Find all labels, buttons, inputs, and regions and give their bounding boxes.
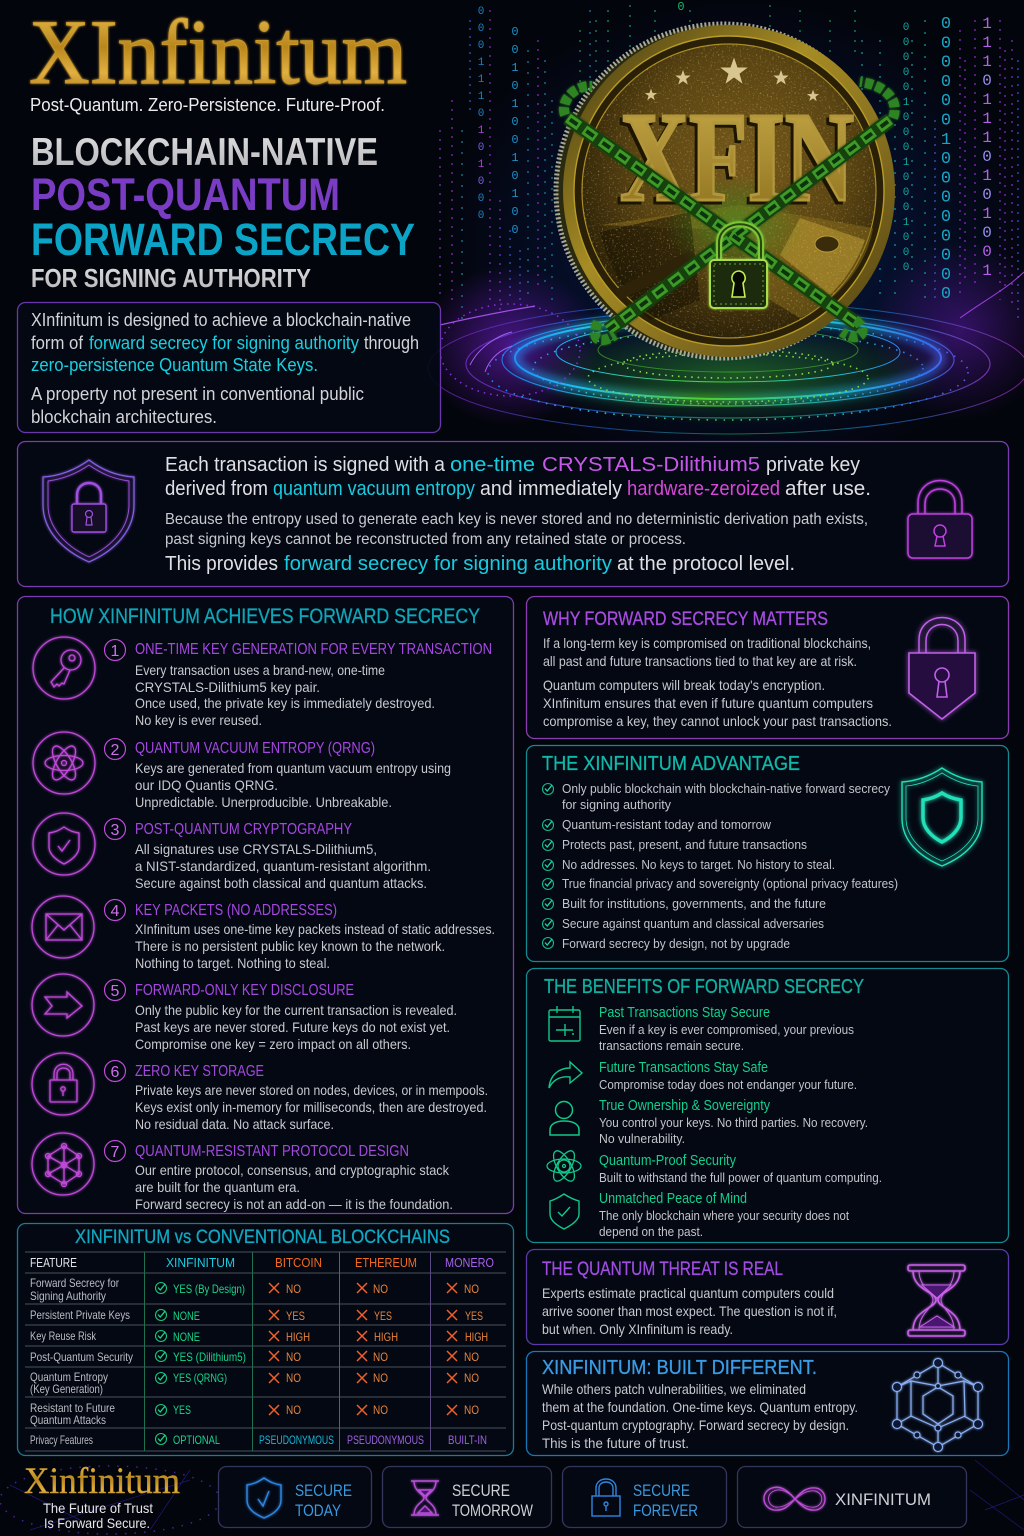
binary digit columns: 0	[903, 37, 909, 49]
table header row	[30, 1255, 494, 1270]
step 7: quantum-resistant protocol design: Forward secrecy is not an add-on — it is the foundation.	[135, 1196, 453, 1212]
text block: them at the foundation. One-time keys. Quantum entropy.	[542, 1399, 858, 1415]
row: key reuse risk: HIGH	[286, 1330, 310, 1344]
binary digit columns: 0	[511, 79, 519, 93]
binary digit columns: 1	[478, 159, 485, 171]
row: persistent private keys: YES	[465, 1309, 483, 1323]
panel: intro statement: form of	[31, 333, 84, 353]
banner text: after use.	[785, 478, 871, 500]
row: post-quantum security: NO	[464, 1350, 479, 1364]
checklist: Quantum-resistant today and tomorrow	[562, 818, 772, 832]
row: key reuse risk: HIGH	[374, 1330, 398, 1344]
table header row: XINFINITUM	[166, 1255, 235, 1270]
row: privacy features	[30, 1433, 487, 1447]
benefit: ownership	[550, 1098, 868, 1146]
benefit: past transactions: Even if a key is ever compromised, your previous	[599, 1023, 854, 1037]
row: forward secrecy: Forward Secrecy for	[30, 1276, 119, 1290]
row: key reuse risk: NONE	[173, 1330, 200, 1344]
step 3: post-quantum cryptography: POST-QUANTUM CRYPTOGRAPHY	[135, 821, 352, 838]
binary digit columns: 1	[511, 187, 519, 201]
binary digit columns: 0	[982, 148, 992, 166]
row: quantum entropy: NO	[286, 1371, 301, 1385]
binary digit columns: 0	[941, 92, 951, 111]
table header row: FEATURE	[30, 1255, 77, 1270]
binary digit columns: 0	[982, 224, 992, 242]
panel: how XInfinitum achieves forward secrecy	[18, 596, 514, 1214]
row: persistent private keys	[30, 1308, 483, 1323]
binary digit columns: 0	[511, 169, 519, 183]
binary digit columns: 1	[982, 91, 992, 109]
binary digit columns: 1	[478, 57, 485, 69]
binary digit columns: 1	[511, 61, 519, 75]
checklist: No addresses. No keys to target. No history to steal.	[562, 858, 835, 872]
benefit: ownership: True Ownership & Sovereignty	[599, 1098, 771, 1114]
binary digit columns: 1	[903, 97, 910, 109]
binary digit columns: 0	[903, 67, 909, 79]
step 1: one-time key: No key is ever reused.	[135, 712, 262, 728]
benefit: ownership: You control your keys. No third parties. No recovery.	[599, 1116, 868, 1130]
binary digit columns: 0	[478, 40, 484, 52]
binary digit columns: 1	[511, 151, 519, 165]
badge: secure forever: SECURE	[633, 1481, 690, 1500]
checklist	[542, 782, 898, 951]
main heading: FOR SIGNING AUTHORITY	[31, 263, 311, 293]
main heading	[31, 131, 415, 293]
row: persistent private keys: YES	[286, 1309, 305, 1323]
badge: secure today: TODAY	[295, 1501, 341, 1520]
binary digit columns: 0	[478, 108, 484, 120]
row: privacy features: PSEUDONYMOUS	[347, 1433, 424, 1447]
benefit: past transactions	[549, 1005, 854, 1053]
row: post-quantum security: NO	[286, 1350, 301, 1364]
row: forward secrecy: YES (By Design)	[173, 1282, 245, 1296]
binary digit columns: 0	[982, 243, 992, 261]
step 3: post-quantum cryptography: a NIST-standardized, quantum-resistant algorithm.	[135, 858, 431, 874]
text block: If a long-term key is compromised on traditional blockchains,	[543, 635, 871, 651]
binary digit columns: 1	[511, 97, 519, 111]
panel: intro statement: forward secrecy for signing authority	[89, 333, 359, 353]
binary digit columns: 0	[941, 54, 951, 73]
binary digit columns: 0	[511, 205, 519, 219]
main heading: BLOCKCHAIN-NATIVE	[31, 131, 378, 174]
row: forward secrecy: NO	[286, 1282, 301, 1296]
binary digit columns: 0	[903, 82, 909, 94]
coin padlock	[710, 224, 767, 308]
step 6: zero key storage: Keys exist only in-memory for milliseconds, then are destroyed.	[135, 1099, 487, 1115]
step 6: zero key storage: 6	[111, 1064, 120, 1081]
particle rain	[440, 5, 1018, 320]
step 1: one-time key	[33, 637, 492, 728]
banner text	[165, 454, 871, 575]
main heading: FORWARD SECRECY	[31, 214, 415, 265]
step 4: key packets	[32, 896, 495, 971]
step 3: post-quantum cryptography: All signatures use CRYSTALS-Dilithium5,	[135, 841, 377, 857]
row: quantum entropy	[30, 1370, 479, 1396]
panel: intro statement: A property not present in conventional public	[31, 384, 364, 404]
row: resistant to future attacks: NO	[464, 1403, 479, 1417]
benefit: future transactions: Future Transactions Stay Safe	[599, 1060, 768, 1076]
icon: shield with lock	[43, 460, 134, 562]
text block	[542, 1285, 837, 1337]
step 2: quantum vacuum entropy: our IDQ Quantis QRNG.	[135, 777, 278, 793]
step 6: zero key storage: ZERO KEY STORAGE	[135, 1063, 264, 1080]
panel: comparison table	[18, 1224, 514, 1456]
binary digit columns: 0	[941, 189, 951, 208]
binary digit columns: 0	[511, 133, 519, 147]
row: resistant to future attacks	[30, 1401, 479, 1427]
row: resistant to future attacks: Resistant to Future	[30, 1401, 115, 1415]
binary digit columns: 0	[478, 6, 484, 18]
step 7: quantum-resistant protocol design: 7	[111, 1144, 120, 1161]
logo: XInfinitum: XInfinitum	[29, 1, 407, 103]
binary digit columns: 0	[478, 176, 484, 188]
icon: crystal lattice	[892, 1358, 982, 1452]
benefit: future transactions: Compromise today does not endanger your future.	[599, 1078, 857, 1092]
step 3: post-quantum cryptography	[33, 813, 431, 891]
text block: Quantum computers will break today's encryption.	[543, 677, 825, 693]
binary digit columns: 1	[903, 217, 910, 229]
banner text: private key	[766, 454, 860, 476]
footer starfield	[0, 1460, 1024, 1534]
step 2: quantum vacuum entropy: QUANTUM VACUUM ENTROPY (QRNG)	[135, 740, 375, 757]
row: key reuse risk: HIGH	[465, 1330, 488, 1344]
benefit: quantum-proof: Quantum-Proof Security	[599, 1153, 737, 1169]
panel: the quantum threat is real	[526, 1250, 1008, 1344]
binary digit columns: 0	[903, 202, 909, 214]
step 5: forward-only key disclosure: FORWARD-ONLY KEY DISCLOSURE	[135, 982, 354, 999]
badge: secure forever	[562, 1466, 726, 1528]
binary digit columns: 1	[478, 91, 485, 103]
footer logo and slogan	[24, 1461, 180, 1531]
badge: xinfinitum infinity	[738, 1466, 966, 1528]
checklist: Only public blockchain with blockchain-native forward secrecy	[562, 782, 891, 796]
benefit: quantum-proof	[547, 1148, 882, 1185]
binary digit columns: 0	[903, 127, 909, 139]
step 7: quantum-resistant protocol design: are built for the quantum era.	[135, 1179, 300, 1195]
binary digit columns: 1	[982, 110, 992, 128]
icon: hourglass	[908, 1265, 965, 1336]
binary digit columns: 0	[903, 187, 909, 199]
panel: built different	[526, 1352, 1008, 1456]
checklist: Built for institutions, governments, and the future	[562, 897, 826, 911]
banner text: derived from	[165, 478, 268, 500]
binary digit columns: 0	[941, 112, 951, 130]
benefit: past transactions: transactions remain secure.	[599, 1039, 744, 1053]
main heading: POST-QUANTUM	[31, 169, 340, 220]
text block: While others patch vulnerabilities, we eliminated	[542, 1381, 806, 1397]
coin lettering: XFIN	[620, 86, 854, 228]
step 4: key packets: KEY PACKETS (NO ADDRESSES)	[135, 902, 337, 919]
table header row: BITCOIN	[275, 1255, 322, 1270]
icon: padlock	[909, 618, 975, 719]
chains crossing the coin	[564, 82, 895, 340]
step 1: one-time key: CRYSTALS-Dilithium5 key pair.	[135, 679, 320, 695]
binary digit columns: 0	[903, 247, 909, 259]
step 7: quantum-resistant protocol design: QUANTUM-RESISTANT PROTOCOL DESIGN	[135, 1143, 409, 1160]
text block	[543, 635, 892, 729]
gold coin	[556, 24, 895, 358]
banner text: and immediately	[480, 478, 622, 500]
text block: Post-quantum cryptography. Forward secrecy by design.	[542, 1417, 849, 1433]
binary digit columns: 1	[982, 205, 992, 223]
banner text: Because the entropy used to generate each key is never stored and no deterministic derivation path exists,	[165, 511, 868, 528]
step 3: post-quantum cryptography: Secure against both classical and quantum attacks.	[135, 875, 427, 891]
step 5: forward-only key disclosure: 5	[111, 983, 120, 1000]
binary digit columns	[478, 0, 992, 304]
binary digit columns: 0	[941, 169, 951, 188]
panel: intro statement: zero-persistence Quantum State Keys.	[31, 355, 318, 375]
panel: intro statement	[18, 302, 440, 432]
row: quantum entropy: NO	[464, 1371, 479, 1385]
binary digit columns: 0	[941, 15, 951, 34]
step 1: one-time key: Once used, the private key is immediately destroyed.	[135, 695, 435, 711]
binary digit columns: 0	[478, 210, 484, 222]
banner text: at the protocol level.	[617, 553, 795, 575]
text block: XInfinitum ensures that even if future quantum computers	[543, 695, 873, 711]
holographic rings	[428, 272, 1024, 434]
badge: secure tomorrow: SECURE	[452, 1481, 510, 1500]
banner text: one-time	[450, 454, 535, 476]
row: persistent private keys: Persistent Private Keys	[30, 1308, 130, 1322]
binary digit columns: 1	[982, 34, 992, 52]
heading: THE QUANTUM THREAT IS REAL	[542, 1259, 783, 1280]
heading: XINFINITUM: BUILT DIFFERENT.	[542, 1357, 817, 1379]
step 2: quantum vacuum entropy: Keys are generated from quantum vacuum entropy using	[135, 760, 451, 776]
badge: secure today	[218, 1466, 372, 1528]
benefit: peace of mind	[550, 1191, 849, 1239]
row: quantum entropy: YES (QRNG)	[173, 1371, 227, 1385]
row: resistant to future attacks: Quantum Attacks	[30, 1413, 106, 1427]
binary digit columns: 0	[903, 142, 909, 154]
row: privacy features: OPTIONAL	[173, 1433, 220, 1447]
binary digit columns: 1	[982, 167, 992, 185]
benefit: ownership: No vulnerability.	[599, 1132, 685, 1146]
text block: arrive sooner than most expect. The question is not if,	[542, 1303, 837, 1319]
panel: intro statement: blockchain architectures.	[31, 407, 217, 427]
binary digit columns: 0	[982, 72, 992, 90]
panel: one-time key banner	[18, 442, 1008, 586]
step 5: forward-only key disclosure: Compromise one key = zero impact on all others.	[135, 1036, 411, 1052]
row: forward secrecy: NO	[464, 1282, 479, 1296]
panel: intro statement: XInfinitum is designed to achieve a blockchain-native	[31, 310, 411, 330]
row: key reuse risk: Key Reuse Risk	[30, 1329, 97, 1343]
step 1: one-time key: 1	[111, 643, 120, 660]
binary digit columns: 0	[511, 115, 519, 129]
binary digit columns: 0	[478, 142, 484, 154]
badge: secure tomorrow	[382, 1466, 552, 1528]
step 6: zero key storage	[32, 1053, 488, 1132]
step 4: key packets: 4	[111, 903, 120, 920]
table header row: MONERO	[445, 1255, 494, 1270]
step 2: quantum vacuum entropy	[33, 732, 451, 810]
step 2: quantum vacuum entropy: 2	[111, 742, 120, 759]
checklist: Secure against quantum and classical adversaries	[562, 917, 824, 931]
benefit: peace of mind: The only blockchain where your security does not	[599, 1209, 849, 1223]
binary digit columns: 0	[478, 193, 484, 205]
panel: benefits of forward secrecy	[526, 968, 1008, 1242]
row: post-quantum security	[30, 1350, 479, 1364]
step 7: quantum-resistant protocol design: Our entire protocol, consensus, and cryptographic stack	[135, 1162, 450, 1178]
banner text: past signing keys cannot be reconstructed from any retained state or process.	[165, 531, 686, 548]
binary digit columns: 0	[903, 172, 909, 184]
binary digit columns: 1	[941, 131, 951, 150]
row: post-quantum security: NO	[373, 1350, 388, 1364]
step 4: key packets: XInfinitum uses one-time key packets instead of static addresses.	[135, 921, 495, 937]
row: quantum entropy: Quantum Entropy	[30, 1370, 108, 1384]
heading: THE XINFINITUM ADVANTAGE	[542, 753, 800, 775]
step 4: key packets: There is no persistent public key known to the network.	[135, 938, 445, 954]
footer logo and slogan: The Future of Trust	[43, 1500, 153, 1516]
checklist: True financial privacy and sovereignty (optional privacy features)	[562, 877, 898, 891]
table heading: XINFINITUM vs CONVENTIONAL BLOCKCHAINS	[75, 1227, 450, 1248]
text block	[542, 1381, 858, 1451]
badge: secure tomorrow: TOMORROW	[452, 1501, 533, 1520]
row: privacy features: PSEUDONYMOUS	[259, 1433, 334, 1447]
row: privacy features: Privacy Features	[30, 1433, 93, 1447]
step 5: forward-only key disclosure: Past keys are never stored. Future keys do not exist yet.	[135, 1019, 450, 1035]
binary digit columns: 0	[511, 223, 519, 237]
step 6: zero key storage: Private keys are never stored on nodes, devices, or in mempools.	[135, 1082, 488, 1098]
badge: secure forever: FOREVER	[633, 1501, 698, 1520]
row: quantum entropy: (Key Generation)	[30, 1382, 103, 1396]
step 5: forward-only key disclosure: Only the public key for the current transaction is revealed.	[135, 1002, 457, 1018]
step 2: quantum vacuum entropy: Unpredictable. Unerproducible. Unbreakable.	[135, 794, 392, 810]
text block: Experts estimate practical quantum computers could	[542, 1285, 834, 1301]
benefit: future transactions	[549, 1060, 857, 1092]
heading: WHY FORWARD SECRECY MATTERS	[543, 609, 828, 630]
hero illustration: padlocked gold coin over binary rain	[420, 0, 1024, 480]
banner text: CRYSTALS-Dilithium5	[542, 454, 760, 476]
row: resistant to future attacks: NO	[286, 1403, 301, 1417]
row: key reuse risk	[30, 1329, 488, 1344]
binary digit columns: 0	[941, 227, 951, 246]
binary digit columns: 0	[941, 266, 951, 285]
row: privacy features: BUILT-IN	[448, 1433, 487, 1447]
binary digit columns: 0	[941, 285, 951, 304]
binary digit columns: 0	[941, 247, 951, 266]
panel: why forward secrecy matters	[526, 596, 1008, 738]
row: post-quantum security: YES (Dilithium5)	[173, 1350, 246, 1364]
panel: intro statement: through	[364, 333, 419, 353]
banner text: Each transaction is signed with a	[165, 454, 446, 476]
benefit: peace of mind: depend on the past.	[599, 1225, 703, 1239]
step 1: one-time key: ONE-TIME KEY GENERATION FOR EVERY TRANSACTION	[135, 641, 492, 658]
benefit: quantum-proof: Built to withstand the full power of quantum computing.	[599, 1171, 882, 1185]
banner text: hardware-zeroized	[627, 478, 780, 500]
binary digit columns: 0	[677, 0, 685, 14]
heading: HOW XINFINITUM ACHIEVES FORWARD SECRECY	[50, 605, 480, 628]
table header row: ETHEREUM	[355, 1255, 417, 1270]
binary digit columns: 1	[982, 262, 992, 280]
binary digit columns: 0	[903, 112, 909, 124]
text block: all past and future transactions tied to that key are at risk.	[543, 653, 857, 669]
binary digit columns: 1	[982, 15, 992, 33]
binary digit columns: 1	[478, 74, 485, 86]
step 6: zero key storage: No residual data. No attack surface.	[135, 1116, 334, 1132]
panel: the XInfinitum advantage	[526, 746, 1008, 962]
step 4: key packets: Nothing to target. Nothing to steal.	[135, 955, 330, 971]
icon: magenta padlock	[908, 480, 972, 558]
row: quantum entropy: NO	[373, 1371, 388, 1385]
binary digit columns: 1	[982, 129, 992, 147]
coin stars	[644, 56, 820, 102]
checklist: Forward secrecy by design, not by upgrade	[562, 937, 790, 951]
text block: compromise a key, they cannot unlock your past transactions.	[543, 713, 892, 729]
binary digit columns: 0	[941, 150, 951, 169]
binary digit columns: 0	[903, 262, 909, 274]
footer logo and slogan: Xinfinitum	[24, 1461, 180, 1502]
heading: THE BENEFITS OF FORWARD SECRECY	[544, 976, 864, 998]
benefit: past transactions: Past Transactions Stay Secure	[599, 1005, 770, 1021]
banner text: forward secrecy for signing authority	[284, 553, 612, 575]
checklist: Protects past, present, and future transactions	[562, 838, 807, 852]
binary digit columns: 0	[941, 208, 951, 227]
binary digit columns: 0	[941, 34, 951, 53]
footer logo and slogan: Is Forward Secure.	[44, 1515, 150, 1531]
row: forward secrecy: Signing Authority	[30, 1289, 106, 1303]
binary digit columns: 0	[511, 25, 519, 39]
binary digit columns: 0	[982, 186, 992, 204]
row: forward secrecy: NO	[373, 1282, 388, 1296]
binary digit columns: 1	[903, 157, 910, 169]
row: forward secrecy	[30, 1276, 479, 1303]
row: persistent private keys: YES	[374, 1309, 392, 1323]
step 3: post-quantum cryptography: 3	[111, 822, 120, 839]
text block: This is the future of trust.	[542, 1435, 689, 1451]
binary digit columns: 0	[903, 52, 909, 64]
step 5: forward-only key disclosure	[32, 974, 457, 1052]
badge: xinfinitum infinity: XINFINITUM	[835, 1490, 931, 1509]
binary digit columns: 0	[478, 23, 484, 35]
row: persistent private keys: NONE	[173, 1309, 200, 1323]
row: resistant to future attacks: NO	[373, 1403, 388, 1417]
banner text: This provides	[165, 553, 278, 575]
binary digit columns: 0	[903, 22, 909, 34]
checklist: for signing authority	[562, 798, 672, 812]
row: post-quantum security: Post-Quantum Security	[30, 1350, 133, 1364]
text block: but when. Only XInfinitum is ready.	[542, 1321, 733, 1337]
icon: teal shield	[902, 768, 982, 866]
binary digit columns: 0	[941, 73, 951, 92]
binary digit columns: 0	[511, 43, 519, 57]
step 7: quantum-resistant protocol design	[32, 1133, 453, 1212]
tagline: Post-Quantum. Zero-Persistence. Future-Proof.	[30, 95, 385, 115]
binary digit columns: 1	[982, 53, 992, 71]
benefit: peace of mind: Unmatched Peace of Mind	[599, 1191, 747, 1207]
step 1: one-time key: Every transaction uses a brand-new, one-time	[135, 662, 385, 678]
badge: secure today: SECURE	[295, 1481, 352, 1500]
binary digit columns: 1	[478, 125, 485, 137]
banner text: quantum vacuum entropy	[273, 478, 475, 500]
binary digit columns: 0	[903, 232, 909, 244]
row: resistant to future attacks: YES	[173, 1403, 191, 1417]
